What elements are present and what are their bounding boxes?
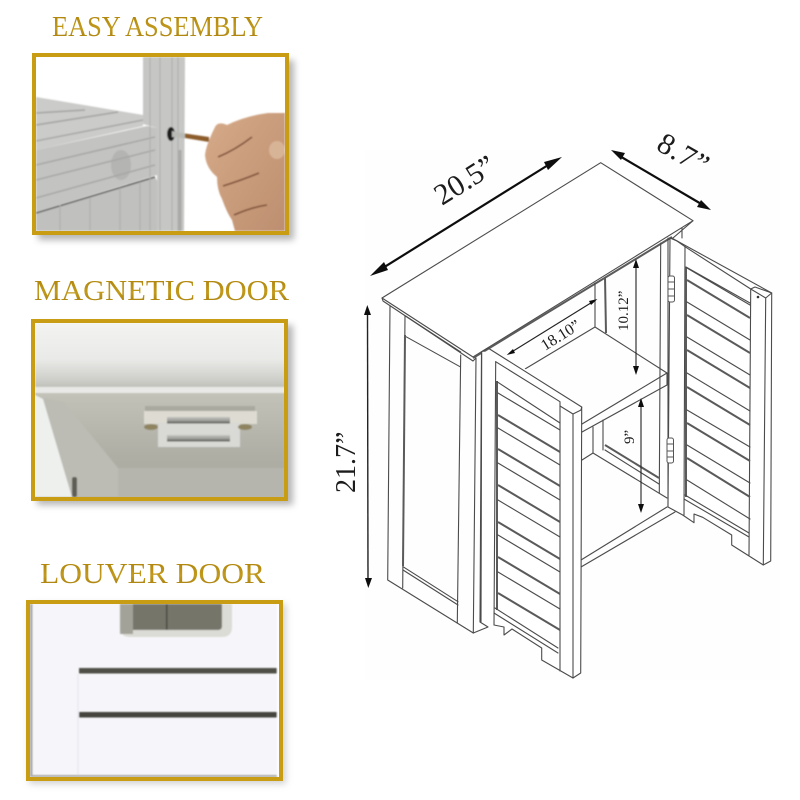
heading: easy assembly: EASY ASSEMBLY (52, 11, 263, 43)
heading: magnetic door: MAGNETIC DOOR (34, 275, 290, 307)
cabinet top (382, 163, 693, 361)
diagram: cabinet technical drawing (331, 126, 780, 680)
photo: door edge (35, 387, 285, 497)
arrow: depth 8.7 (611, 150, 711, 210)
icon: screw hole and hex key (167, 127, 209, 142)
louver slats: right door (687, 268, 750, 519)
dimension label: 10.12 inches: 10.12” (616, 291, 632, 331)
photo: louver slats (78, 668, 277, 775)
cabinet interior and shelves (525, 238, 675, 567)
right door (667, 238, 772, 565)
panel: louver door photo (28, 602, 286, 784)
dimension label: 21.7 inches: 21.7” (331, 432, 362, 493)
heading: louver door: LOUVER DOOR (40, 558, 266, 590)
photo: cabinet shelf and side post (36, 57, 185, 231)
arrow: upper shelf height 10.12 (633, 259, 639, 375)
arrow: height 21.7 (364, 305, 372, 588)
photo: door cut-out (120, 604, 232, 637)
icon: magnetic latch (144, 406, 257, 447)
dimension label: 8.7 inches: 8.7” (652, 126, 715, 182)
arrow: interior width 18.10 (507, 299, 598, 355)
panel: easy assembly photo (34, 55, 294, 240)
panel: magnetic door photo (33, 321, 293, 505)
arrow: width 20.5 (370, 157, 562, 276)
dimension label: 18.10 inches: 18.10” (538, 317, 584, 354)
icon: door hinge upper (668, 276, 674, 302)
photo: hand (205, 113, 285, 231)
louver slats: left door (498, 393, 560, 630)
icon: door hinge lower (667, 438, 674, 463)
dimension label: 9 inches: 9” (622, 430, 638, 444)
dimension label: 20.5 inches: 20.5” (428, 149, 502, 212)
arrow: lower shelf height 9 (638, 398, 644, 513)
cabinet left side panel (388, 306, 488, 633)
left door (481, 348, 582, 678)
